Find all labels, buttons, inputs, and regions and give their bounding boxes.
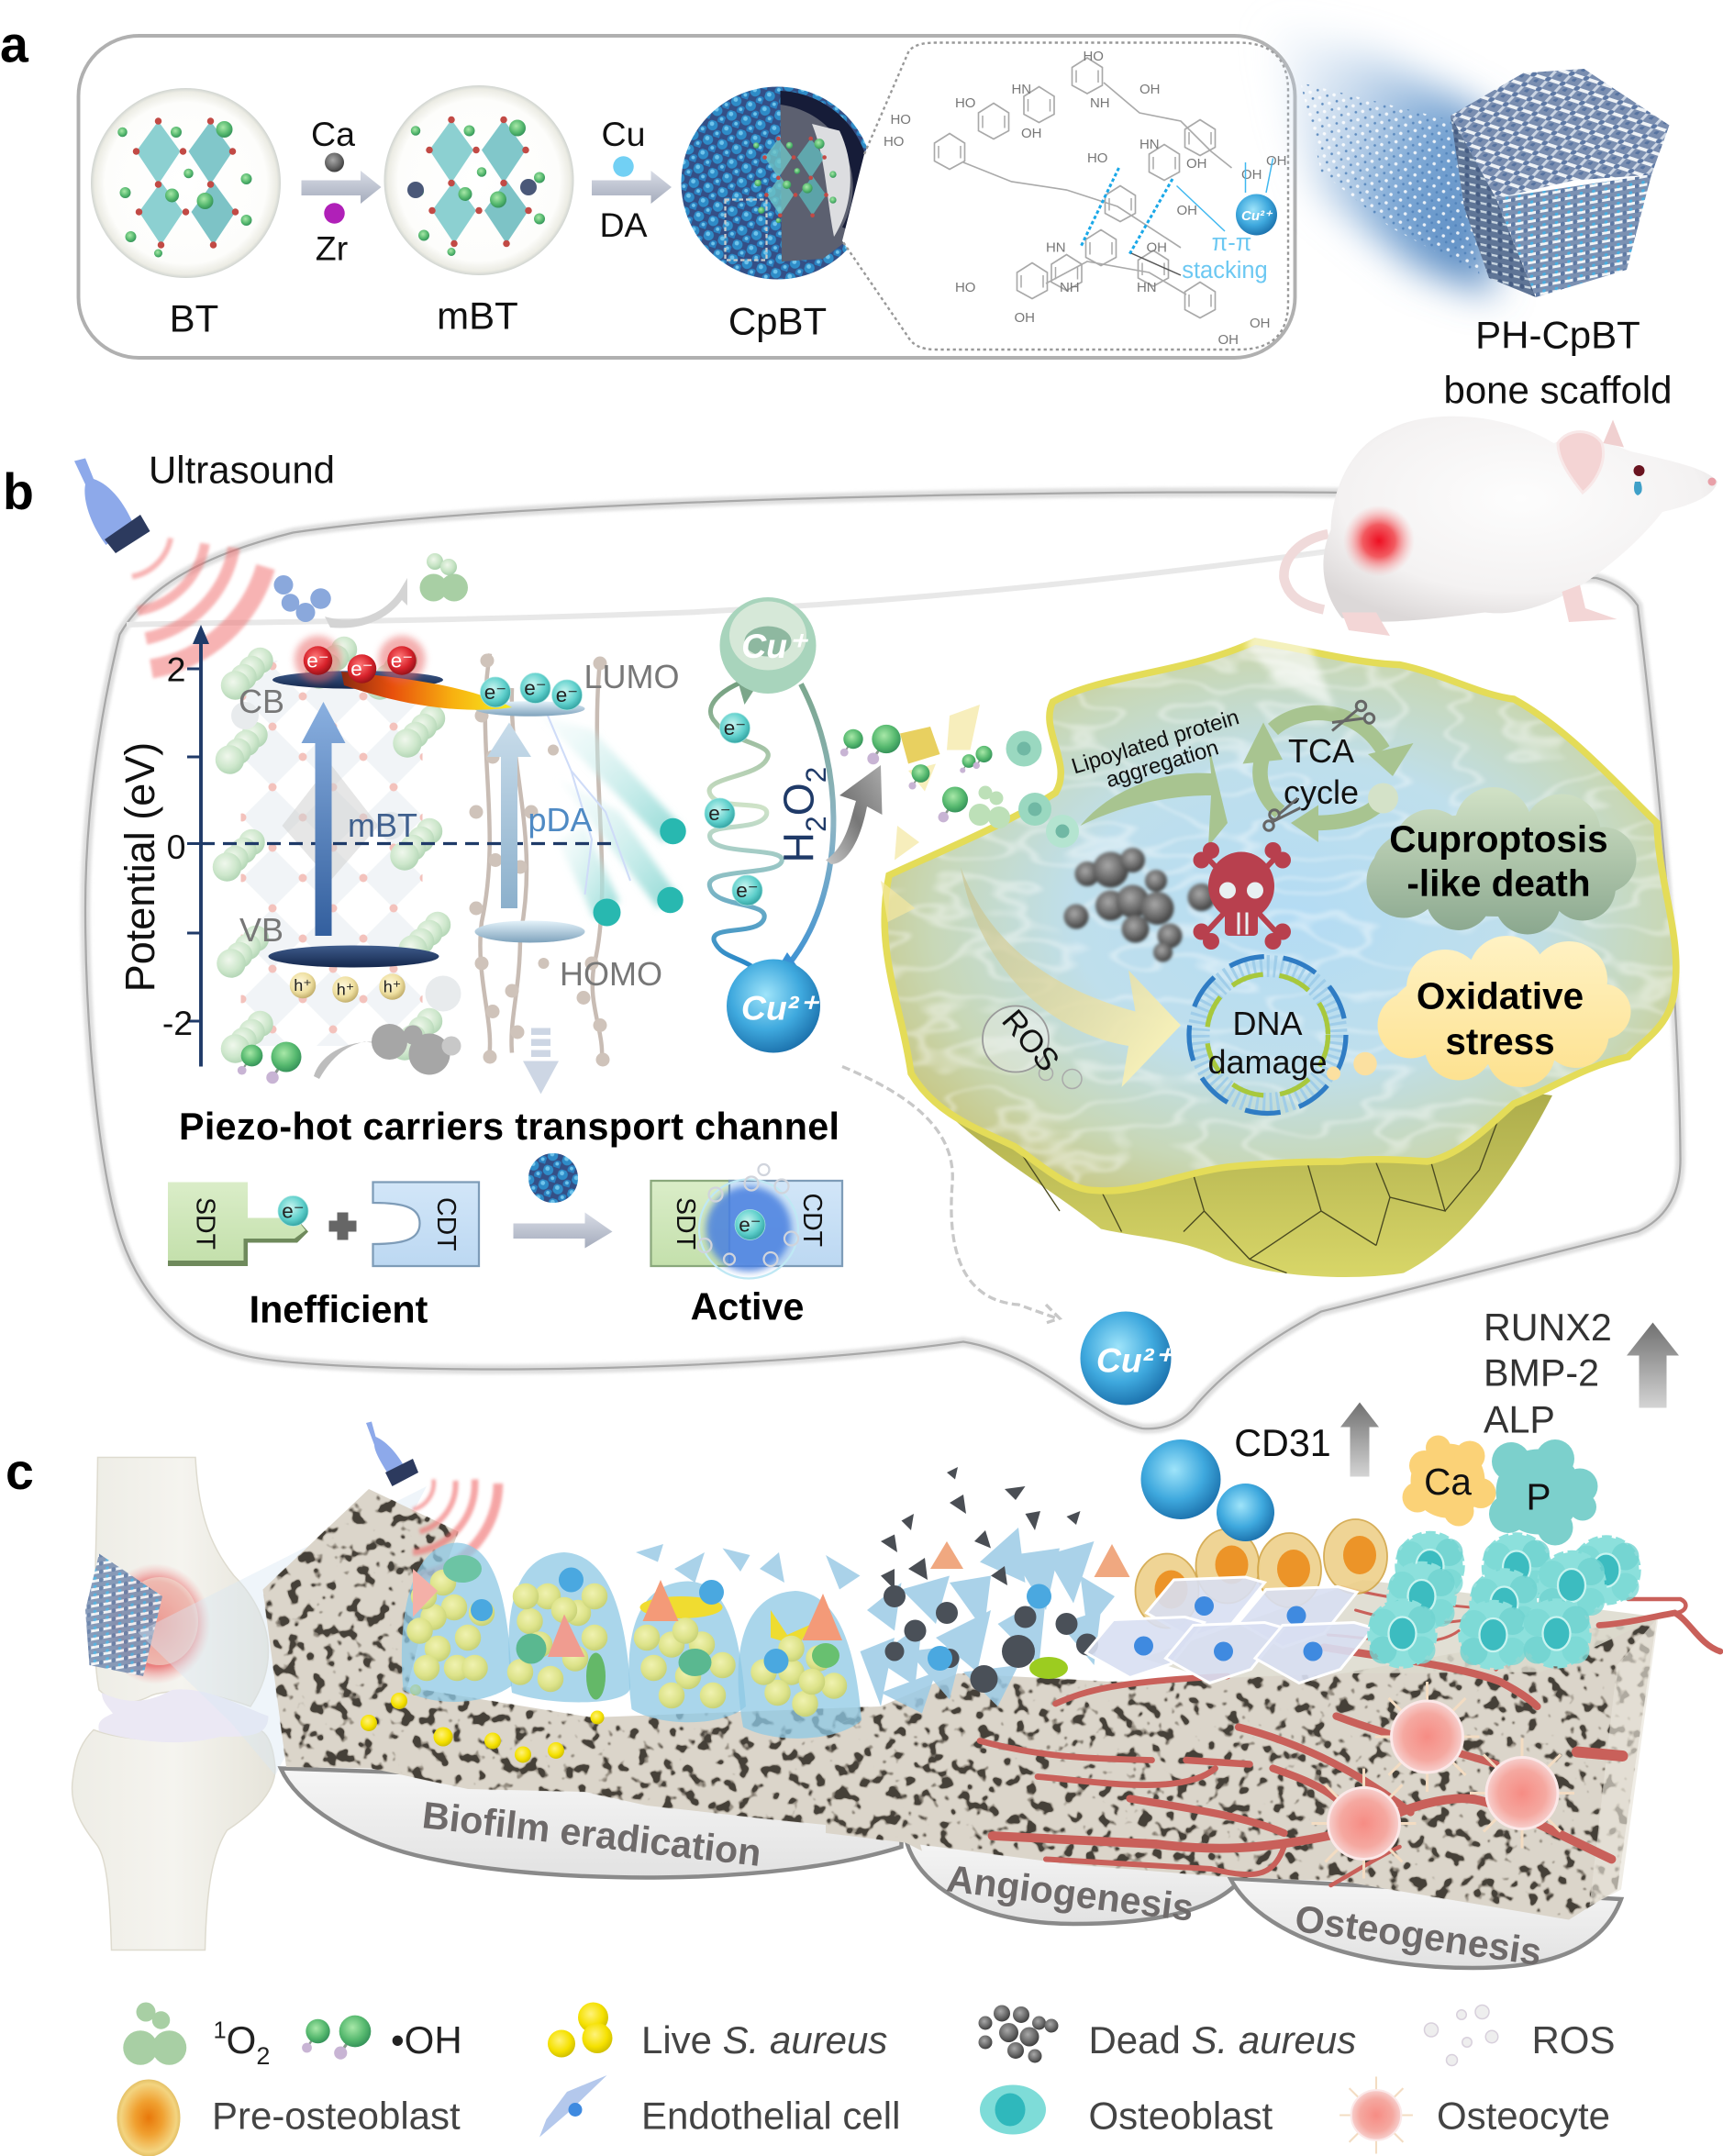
biofilm domes	[402, 1542, 862, 1739]
legend icon: dead bacteria	[978, 2005, 1058, 2062]
wave path	[709, 674, 782, 966]
cells layer	[1085, 1519, 1639, 1878]
disc: angiogenesis	[906, 1837, 1247, 1924]
label: Cu: Cu	[602, 115, 645, 153]
label: H2O2: H	[775, 832, 823, 862]
panel label a: a	[0, 16, 29, 72]
arrow: osteogenic up	[1627, 1322, 1679, 1407]
wave electrons	[705, 713, 762, 906]
label: bone scaffold: bone scaffold	[1443, 368, 1672, 411]
icon: scissors	[1264, 701, 1374, 830]
axis	[187, 625, 613, 1066]
disc: biofilm	[281, 1768, 901, 1877]
pre-osteoblasts	[1135, 1519, 1387, 1628]
LUMO electrons: e⁻	[484, 681, 506, 704]
hot electrons	[295, 636, 426, 683]
disc label: Osteogenesis: Osteogenesis	[1293, 1897, 1544, 1973]
wave electrons: e⁻	[724, 717, 746, 739]
icon: ultrasound probe	[74, 458, 266, 669]
legend icon: hydroxyl	[302, 2016, 371, 2060]
polydopamine molecule: HN	[1046, 239, 1066, 255]
panel a: synthesis frame	[79, 36, 1295, 358]
holes: h⁺	[384, 977, 401, 995]
osteoblasts	[1369, 1533, 1639, 1668]
cloud: Cuproptosis-like death: -like death	[1406, 861, 1591, 904]
left face	[1451, 116, 1536, 297]
SDT block inefficient	[168, 1182, 308, 1266]
LUMO electrons	[481, 672, 583, 710]
axis values: -2	[162, 1004, 193, 1042]
label: RUNX2 BMP-2 ALP: BMP-2	[1484, 1351, 1599, 1394]
polydopamine molecule: OH	[1146, 239, 1167, 255]
top surface right block	[1142, 1580, 1658, 1679]
icon: BT sphere	[91, 88, 281, 278]
Cu redox cycle	[705, 597, 833, 1052]
polydopamine molecule: OH	[1241, 167, 1262, 183]
polydopamine molecule: OH	[1217, 332, 1239, 348]
arrow: activation	[514, 1212, 613, 1248]
foam scaffold	[263, 1489, 1658, 1919]
disc: osteogenesis	[1230, 1878, 1621, 1968]
label: pDA: pDA	[528, 801, 593, 839]
label: Ca: Ca	[311, 115, 355, 153]
funnel from rat to pool	[1245, 545, 1380, 708]
label: mBT: mBT	[348, 806, 417, 844]
legend text: Endothelial cell: Endothelial cell	[641, 2094, 900, 2137]
polydopamine molecule: OH	[1250, 316, 1270, 331]
label: H2O2: 2	[799, 767, 832, 783]
discs	[281, 1768, 1621, 1968]
polydopamine molecule: OH	[1014, 310, 1035, 326]
holes: h⁺	[337, 980, 354, 998]
legend text: Dead S. aureus: Dead S. aureus	[1088, 2018, 1356, 2062]
polydopamine molecule	[884, 49, 1286, 348]
legend	[117, 2002, 1615, 2156]
legend icon: endothelial cell	[539, 2075, 607, 2137]
label: CB: CB	[239, 683, 284, 720]
label: BT: BT	[170, 296, 218, 339]
energy diagram: mBT and pDA	[117, 553, 686, 1094]
legend icon: live bacteria	[548, 2002, 613, 2057]
LUMO bar	[475, 701, 585, 717]
DNA ring	[1189, 956, 1346, 1113]
arrow: ROS ochre	[961, 867, 1181, 1087]
icon: Ca blob: Ca	[1424, 1461, 1472, 1503]
axis values: 0	[167, 828, 185, 866]
polydopamine molecule: OH	[1176, 203, 1197, 218]
Cu2+ spheres	[1140, 1439, 1274, 1541]
disc label: Biofilm eradication: Biofilm eradication	[420, 1794, 763, 1874]
icon: PH-CpBT scaffold cube	[1451, 69, 1669, 297]
dome 3	[628, 1580, 746, 1722]
arrow: CD31 up	[1340, 1402, 1379, 1476]
label: pi-pi stacking: π-π	[1212, 230, 1251, 256]
scaffold haze	[1273, 28, 1493, 295]
hot electrons: e⁻	[350, 657, 373, 680]
Active combined block: CDT	[797, 1193, 827, 1247]
holes: h⁺	[294, 976, 312, 995]
cloud: Cuproptosis-like death	[1366, 783, 1636, 934]
panel b: callout outline	[85, 492, 1681, 1428]
hot electrons: e⁻	[306, 649, 329, 672]
polydopamine molecule: HO	[955, 280, 975, 295]
label: DNA damage: DNA	[1233, 1005, 1302, 1042]
right face light	[1589, 1617, 1658, 1906]
legend text: 1O2: 2	[256, 2042, 270, 2070]
ultrasound probe c	[366, 1421, 418, 1486]
polydopamine molecule: HN	[1139, 137, 1160, 152]
label: TCA cycle: cycle	[1284, 773, 1359, 811]
icon: Cu ion	[613, 156, 634, 177]
flame	[341, 672, 512, 710]
water surface	[884, 641, 1676, 1191]
Cu+ ball	[720, 597, 817, 694]
arrow: mBT to CpBT	[592, 171, 672, 204]
arrow: BT to mBT	[302, 171, 382, 204]
legend text: ROS: ROS	[1531, 2018, 1615, 2062]
arrow: mBT excitation	[302, 702, 346, 936]
legend text: Osteoblast: Osteoblast	[1088, 2094, 1273, 2137]
legend icon: ROS	[1424, 2005, 1498, 2065]
polydopamine molecule: NH	[1090, 95, 1110, 111]
Active combined block: e⁻	[739, 1213, 761, 1236]
legend text: 1O2: 1	[214, 2017, 227, 2043]
ultrasound waves c	[413, 1479, 498, 1575]
cloud: Cuproptosis-like death: Cuproptosis	[1389, 817, 1608, 860]
panel label b: b	[3, 463, 34, 520]
legend text: OH: •OH	[391, 2018, 462, 2062]
legend icon: osteocyte	[1339, 2076, 1413, 2153]
icon: Cu2+ released: Cu²⁺	[1096, 1340, 1174, 1379]
pool base	[911, 1073, 1552, 1277]
label: PH-CpBT: PH-CpBT	[1475, 313, 1640, 356]
label: CpBT: CpBT	[728, 299, 827, 342]
plus	[329, 1212, 357, 1239]
femur	[94, 1457, 269, 1706]
panel label c: c	[6, 1443, 34, 1500]
dashed path to Cu2+	[842, 1066, 1060, 1324]
label: H2O2: 2	[799, 816, 832, 832]
axis values: 2	[167, 650, 185, 688]
red glow	[101, 1563, 211, 1684]
holes	[290, 972, 406, 1003]
label: Active: Active	[691, 1285, 804, 1328]
axis values	[162, 650, 193, 1042]
LUMO electrons: e⁻	[556, 683, 578, 706]
polydopamine molecule: HO	[1083, 49, 1104, 64]
polydopamine molecule: HO	[955, 95, 975, 111]
label: DNA damage: damage	[1207, 1043, 1328, 1081]
label: LUMO: LUMO	[584, 658, 679, 695]
TCA cycle arrows	[1260, 713, 1390, 823]
label: Inefficient: Inefficient	[250, 1288, 428, 1330]
icon: mBT sphere	[384, 85, 574, 275]
Cu2+ ball: Cu²⁺	[741, 988, 819, 1027]
legend text: Pre-osteoblast: Pre-osteoblast	[212, 2094, 461, 2137]
electron	[278, 1195, 308, 1226]
front face	[1495, 174, 1651, 297]
CpBT mini sphere	[528, 1153, 578, 1203]
polydopamine molecule: HO	[1087, 150, 1107, 166]
icon: Cu2+ released	[1080, 1311, 1174, 1405]
label: RUNX2 BMP-2 ALP: RUNX2	[1484, 1306, 1612, 1349]
SDT block inefficient: SDT	[191, 1197, 220, 1250]
tibia	[72, 1728, 275, 1950]
icon: ROS bubble: ROS	[995, 1004, 1066, 1078]
pDA chain	[470, 653, 610, 1066]
label: CD31: CD31	[1234, 1422, 1331, 1464]
released OH and Cu+ particles	[840, 705, 1079, 922]
label: Zr: Zr	[316, 228, 348, 267]
legend icon: osteoblast	[980, 2084, 1046, 2134]
label: Ultrasound: Ultrasound	[149, 448, 335, 491]
icon: Zr ion	[324, 203, 345, 224]
icon: CpBT sphere	[682, 86, 873, 279]
label: TCA cycle: TCA	[1288, 732, 1354, 770]
polydopamine molecule: HN	[1137, 280, 1157, 295]
VB bar	[269, 945, 439, 967]
CB bar	[272, 671, 443, 689]
polydopamine molecule: OH	[1139, 82, 1160, 97]
icon: Ca blob	[1402, 1435, 1495, 1526]
return arc	[787, 683, 833, 966]
icon: skull	[1193, 842, 1291, 950]
water to hydroxyl radical	[238, 1024, 461, 1084]
icon: P blob: P	[1526, 1475, 1551, 1517]
implanted scaffold patch	[85, 1553, 162, 1676]
legend text: Live S. aureus: Live S. aureus	[641, 2018, 887, 2062]
label: H2O2: O	[775, 783, 823, 816]
arrow: down to channel	[523, 1028, 559, 1094]
polydopamine molecule: OH	[1266, 153, 1286, 169]
inflamed lattice	[121, 1577, 198, 1665]
arrow: grey to pool	[826, 765, 882, 864]
Piezo heading: Piezo-hot carriers transport channel	[179, 1106, 839, 1148]
polydopamine molecule: HO	[890, 112, 911, 128]
arrowheads	[739, 681, 801, 980]
label: mBT: mBT	[437, 294, 518, 337]
osteocytes	[1311, 1682, 1574, 1878]
dome 1	[402, 1542, 512, 1702]
callout: molecular structure	[842, 42, 1288, 350]
dome 2	[507, 1552, 630, 1702]
axis title: Potential (eV)	[117, 742, 163, 992]
label: pi-pi stacking: stacking	[1182, 258, 1268, 283]
disc label: Angiogenesis: Angiogenesis	[944, 1857, 1195, 1929]
electron: e⁻	[282, 1199, 305, 1222]
HOMO bar	[475, 920, 585, 942]
Active combined block	[651, 1164, 842, 1278]
Cu+ ball: Cu⁺	[741, 627, 808, 665]
polydopamine molecule: OH	[1021, 126, 1041, 141]
rim line	[884, 641, 1676, 1191]
cloud: Oxidative stress	[1327, 936, 1630, 1087]
TCA arrowheads	[1242, 722, 1413, 842]
polydopamine molecule: OH	[1186, 156, 1206, 172]
icon: rat	[1284, 417, 1717, 636]
hot electrons: e⁻	[391, 649, 413, 672]
arrow: pDA excitation	[487, 722, 531, 908]
cloud: Oxidative stress: stress	[1445, 1020, 1555, 1062]
text: Lipoylated protein aggregation: Lipoylated protein	[1069, 705, 1242, 779]
mBT lattice	[213, 637, 461, 1063]
label: RUNX2 BMP-2 ALP: ALP	[1484, 1398, 1555, 1440]
Active combined block: SDT	[671, 1197, 700, 1250]
icon: Ca ion	[325, 152, 344, 172]
pool: tumor bowl	[884, 641, 1676, 1277]
biofilm debris	[636, 1467, 1129, 1713]
CDT block inefficient: CDT	[431, 1197, 461, 1251]
icon: Cu2+ small ball	[1236, 194, 1277, 235]
cartilage	[98, 1689, 269, 1742]
label: DA: DA	[599, 206, 648, 244]
Cu2+ ball	[727, 959, 820, 1052]
arrow: lipoylated green	[1080, 743, 1228, 846]
CDT block inefficient	[373, 1182, 479, 1266]
central and right block	[826, 1617, 1657, 1919]
knee joint illustration	[72, 1457, 427, 1950]
legend text: 1O2: O	[227, 2018, 256, 2062]
live S. aureus in scaffold	[361, 1684, 605, 1762]
floor and tower	[263, 1489, 922, 1850]
legend icon: pre-osteoblast	[117, 2079, 181, 2156]
icon: ROS bubble	[983, 1004, 1082, 1088]
text: Lipoylated protein aggregation: aggregation	[1103, 735, 1221, 793]
legend icon: singlet oxygen	[123, 2002, 186, 2065]
blood vessels	[980, 1586, 1720, 1885]
cloud: Oxidative stress: Oxidative	[1417, 974, 1584, 1017]
wave electrons: e⁻	[708, 802, 731, 825]
icon: P blob	[1489, 1439, 1597, 1545]
wave electrons: e⁻	[736, 879, 759, 902]
polydopamine molecule: HO	[884, 134, 904, 150]
polydopamine molecule: HN	[1011, 82, 1031, 97]
label: HOMO: HOMO	[560, 955, 662, 993]
legend text: Osteocyte: Osteocyte	[1437, 2094, 1610, 2137]
label: VB: VB	[239, 911, 283, 949]
dome 4	[739, 1591, 862, 1739]
dead bacteria cluster	[1063, 848, 1215, 961]
LUMO electrons: e⁻	[524, 676, 547, 699]
top face	[1451, 69, 1669, 198]
oxygen to singlet oxygen	[274, 553, 468, 628]
endothelial cells	[1085, 1577, 1373, 1683]
comets and lightning	[539, 716, 686, 926]
cracks	[1018, 1115, 1500, 1272]
zoom wedge	[138, 1486, 427, 1775]
polydopamine molecule: NH	[1060, 280, 1080, 295]
icon: Cu2+ small ball: Cu²⁺	[1241, 208, 1273, 224]
